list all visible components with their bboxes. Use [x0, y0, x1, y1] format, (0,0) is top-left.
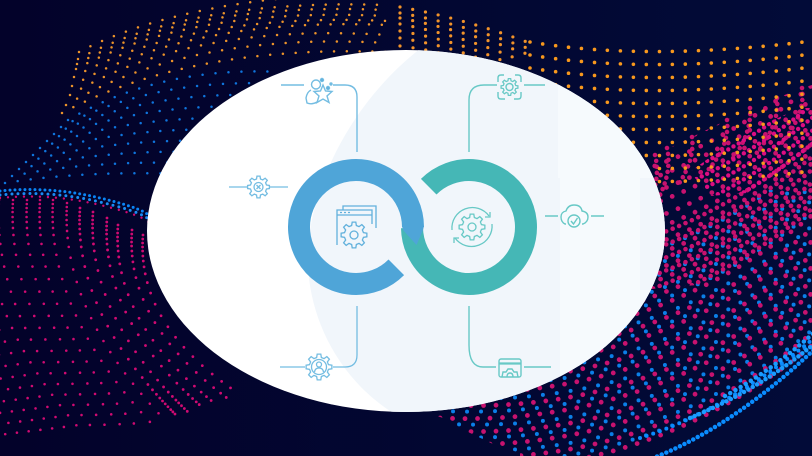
teal ring: [412, 170, 526, 284]
dot band: bright blue lower edge: [540, 318, 812, 456]
dot field: lower left pink columns, left part: [0, 200, 163, 435]
dot field: lower left pink columns, right part: [80, 208, 238, 415]
dot field: top centre orange: [400, 7, 527, 70]
dot field: lower right pink: [438, 85, 812, 456]
dot field: upper right pink columns: [652, 88, 803, 195]
blue ring: [299, 170, 413, 284]
dot field: upper right dense magenta: [692, 108, 812, 196]
white ellipse panel: [147, 45, 680, 420]
connector and icon: gear with person: [280, 306, 357, 380]
centre icon: windows with gear: [337, 206, 376, 248]
dot field: lower right blue: [451, 190, 812, 456]
dot ridge: left band: [0, 190, 150, 225]
connector and icon: cloud with check: [545, 205, 604, 227]
centre icon: gear with cycle arrows: [452, 208, 492, 246]
connector and icon: gear with cross: [229, 176, 288, 198]
infinity loop: [299, 170, 526, 284]
blue ring tip: [402, 226, 424, 245]
connector and icon: person with star: [281, 78, 357, 152]
dot field: upper right mid density pink: [651, 143, 812, 289]
connector and icon: browser window with gear: [469, 306, 551, 377]
connector and icon: gear in arrows frame: [469, 75, 545, 152]
dot field: upper left orange: [62, 0, 400, 113]
dot field: upper left blue: [5, 71, 280, 183]
dot field: upper right orange: [530, 40, 812, 182]
